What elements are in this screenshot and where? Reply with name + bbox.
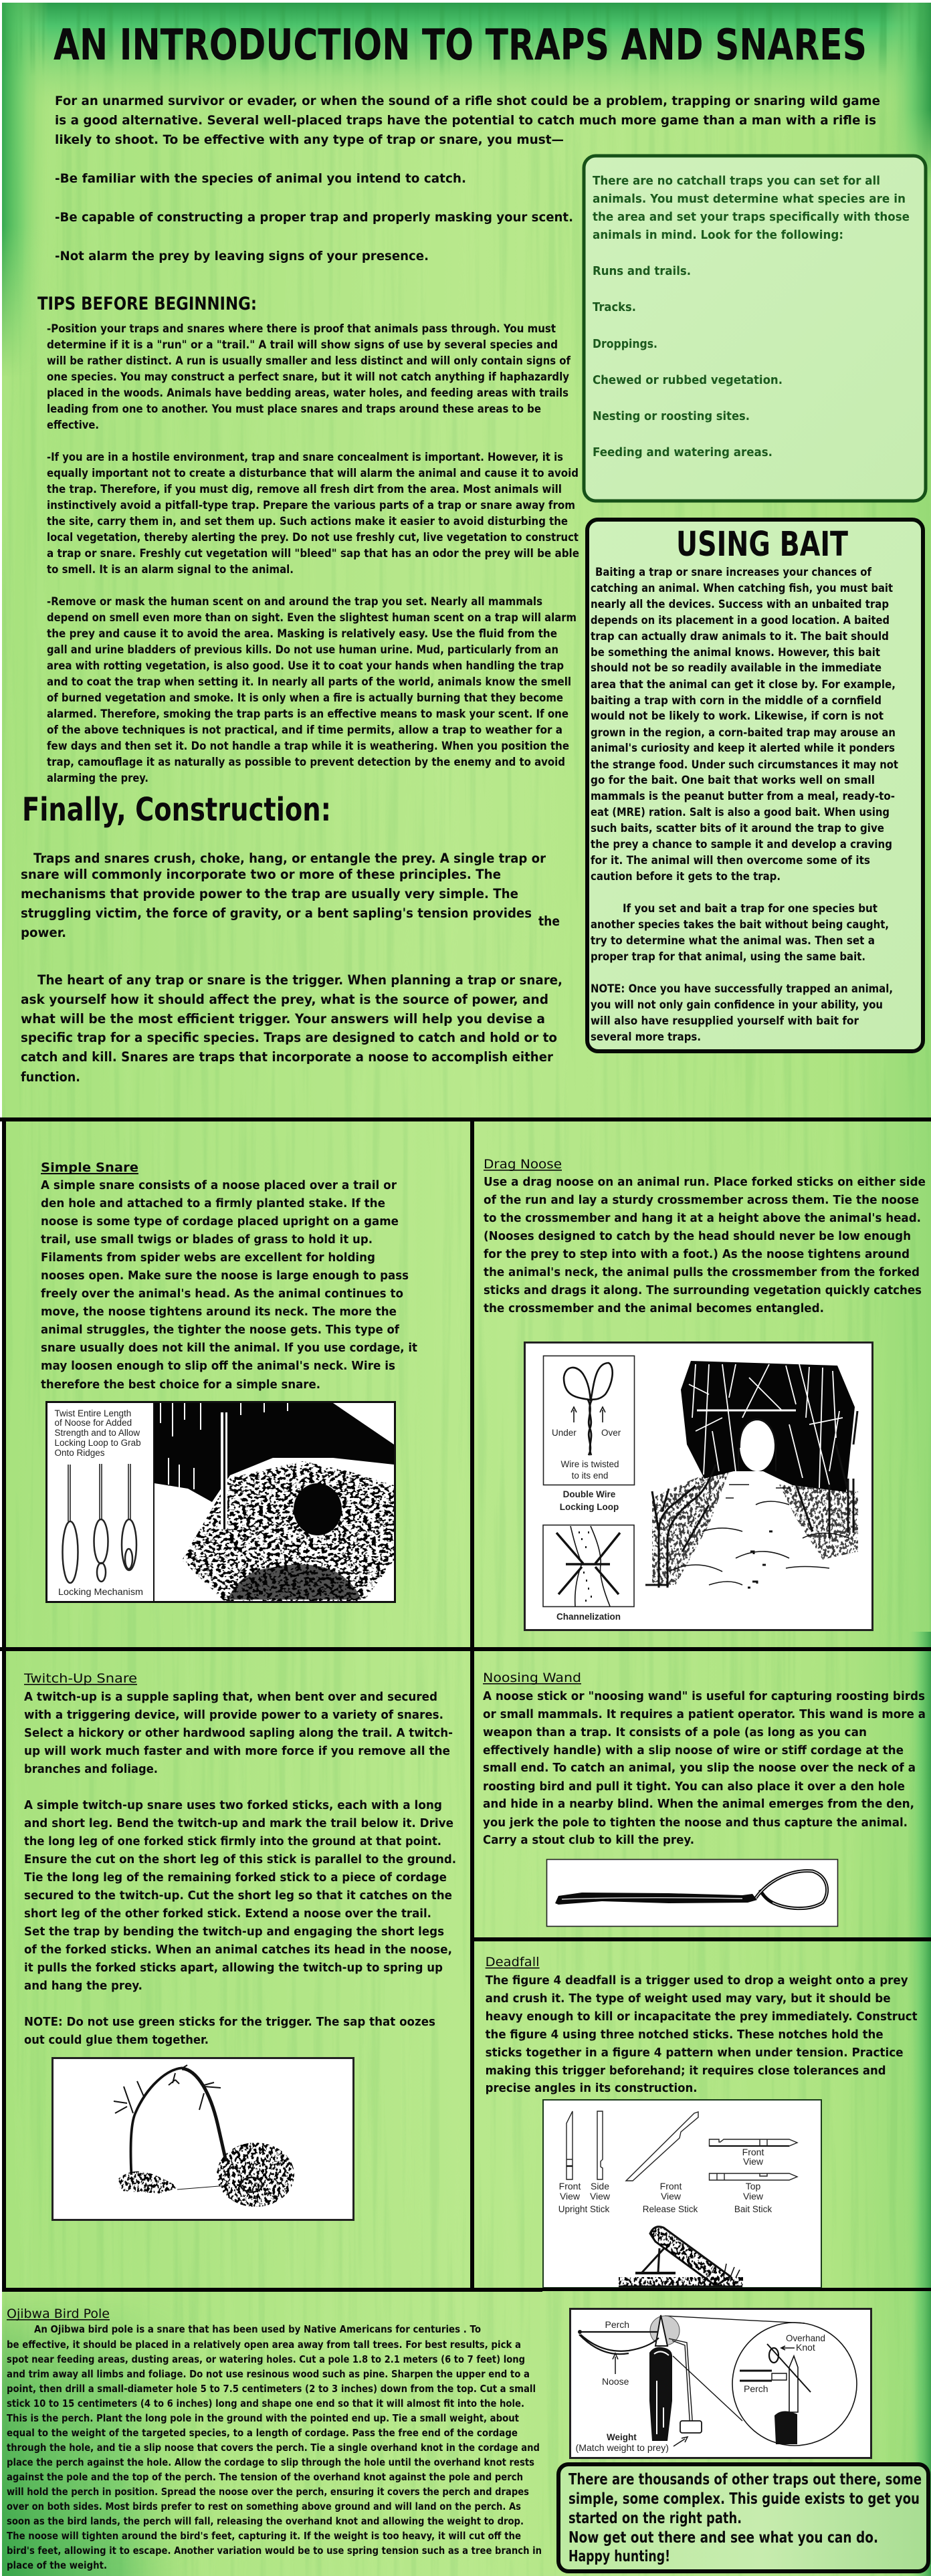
labels [575,2319,825,2453]
bait text: grown in the region, a corn-baited trap may arouse an [591,726,896,739]
bait text: be something the animal knows. However, this bait [591,646,880,659]
bait text: try to determine what the animal was. Then set a [591,934,875,947]
panel: no catchall traps: Tracks. [593,300,636,314]
bait text: trap can actually draw animals to it. The bait should [591,630,889,643]
illustration: drag noose [524,1343,872,1630]
labels: (Match weight to prey) [575,2442,669,2453]
tips text: -If you are in a hostile environment, trap and snare concealment is important. However, it is [47,451,563,463]
figure: bait stick: Front [742,2147,764,2157]
arrows [613,2353,688,2446]
intro paragraph [55,94,880,147]
tips text: the trap. Therefore, if you must dig, remove all fresh dirt from the area. Most animals will [47,483,562,496]
twitch-up text: Ensure the cut on the short leg of this stick is parallel to the ground. [24,1852,456,1866]
panel: simple snare [41,1162,417,1603]
panel: deadfall [474,1941,931,2288]
heading: drag noose: Drag Noose [484,1157,562,1172]
panel: no catchall traps: There are no catchall traps you can set for all [593,174,880,188]
bait text: nearly all the devices. Success with an unbaited trap [591,598,889,611]
ojibwa text: be effective, it should be placed in a relatively open area away from tall trees. For best results, pick a [7,2339,521,2351]
panel: no catchall traps: Runs and trails. [593,264,691,278]
ojibwa text: The noose will tighten around the bird's feet, capturing it. If the weight is too heavy, it will cut off the [7,2530,521,2542]
deadfall text: the figure 4 using three notched sticks. These notches hold the [486,2028,884,2042]
tips text: -Remove or mask the human scent on and around the trap you set. Nearly all mammals [47,595,542,608]
illustration: bent sapling snare [52,2058,353,2220]
noosing wand text: Carry a stout club to kill the prey. [483,1833,694,1847]
panel: no catchall traps: animals in mind. Look for the following: [593,228,843,242]
bait text: If you set and bait a trap for one species but [623,902,877,915]
construction text: what will be the most efficient trigger. Your answers will help you devise a [21,1011,545,1027]
construction text: The heart of any trap or snare is the trigger. When planning a trap or snare, [37,972,562,988]
twitch-up text: of the forked sticks. When an animal catches its head in the noose, [24,1943,452,1957]
ojibwa text: through the hole, and tie a slip noose that covers the perch. Tie a single overhand knot in the cordage and [7,2442,540,2454]
illustration: forest run [644,1361,858,1596]
figure: release stick: Front [660,2181,682,2191]
deadfall text: sticks together in a figure 4 pattern when under tension. Practice [486,2046,904,2060]
tips text: depend on smell even more than on sight. Even the slightest human scent on a trap will alarm [47,611,577,624]
closing callout: started on the right path. [568,2510,742,2527]
heading: ojibwa bird pole: Ojibwa Bird Pole [7,2306,110,2321]
heading: noosing wand: Noosing Wand [483,1671,581,1685]
bait text: you will not only gain confidence in your ability, you [591,998,883,1011]
requirements list: -Be capable of constructing a proper trap and properly masking your scent. [55,210,573,225]
bait text: proper trap for that animal, using the same bait. [591,950,865,963]
twitch-up text: short leg of the other forked stick. Extend a noose over the trail. [24,1907,431,1921]
figure: double wire locking loop [543,1356,634,1512]
simple snare text: A simple snare consists of a noose placed over a trail or [41,1178,397,1192]
panel: ojibwa bird pole [7,2306,871,2571]
snare caption [55,1408,143,1597]
ojibwa text: and trim away all limbs and foliage. Do not use resinous wood such as pine. Sharpen the upper end to a [7,2368,530,2380]
divider [153,1403,154,1601]
tips text: alarming the prey. [47,772,148,784]
tips text: will be rather distinct. A run is usually smaller and less distinct and will only contain signs of [47,354,571,367]
tips text: placed in the woods. Animals have bedding areas, water holes, and feeding areas with trails [47,387,568,399]
noosing wand text: weapon than a trap. It consists of a pole (as long as you can [483,1725,867,1739]
figure: double wire locking loop: to its end [572,1471,608,1481]
tips text: instinctively avoid a pitfall-type trap. Prepare the various parts of a trap or snare away from [47,499,575,512]
bait text [591,566,898,1043]
figure: channelization: Channelization [556,1612,621,1622]
simple snare text: animal struggles, the tighter the noose gets. This type of [41,1323,399,1337]
construction text: the [538,914,560,929]
construction text: Traps and snares crush, choke, hang, or entangle the prey. A single trap or [33,851,546,866]
construction text: snare will commonly incorporate two or more of these principles. The [21,867,501,882]
tips text: a trap or snare. Freshly cut vegetation will "bleed" sap that has an odor the prey will be able [47,547,579,560]
noosing wand text: effectively handle) with a slip noose of wire or stiff cordage at the [483,1743,904,1757]
construction text: function. [21,1069,80,1085]
ojibwa text: place the perch against the hole. Allow the cordage to slip through the hole until the overhand knot rests [7,2456,534,2468]
ojibwa text: will hold the perch in position. Spread the noose over the perch, ensuring it covers the perch and drapes [7,2486,529,2498]
bait text: caution before it gets to the trap. [591,870,781,883]
twitch-up text: branches and foliage. [24,1762,158,1776]
deadfall text [486,1973,918,2095]
simple snare text: move, the noose tightens around its neck. The more the [41,1305,397,1319]
bait text: area that the animal can get it close by. For example, [591,678,896,691]
detail circle lines [665,2316,805,2421]
construction text: ask yourself how it should affect the prey, what is the source of power, and [21,992,548,1007]
tips text: leading from one to another. You must place snares and traps around these areas to be [47,403,541,415]
bait text: another species takes the bait without being caught, [591,918,889,931]
figure: release stick [626,2112,698,2214]
noosing wand text: and hide in a nearby blind. When the animal emerges from the den, [483,1797,914,1811]
twitch-up text: NOTE: Do not use green sticks for the trigger. The sap that oozes [24,2015,435,2029]
simple snare text: snare usually does not kill the animal. If you use cordage, it [41,1341,417,1355]
panel: no catchall traps: the area and set your traps specifically with those [593,210,910,224]
tips text: determine if it is a "run" or a "trail." A trail will show signs of use by several species and [47,338,558,351]
twitch-up text: and short leg. Bend the twitch-up and mark the trail below it. Drive [24,1816,453,1830]
bait text: catching an animal. When catching fish, you must bait [591,582,893,595]
bait text: should not be so readily available in the immediate [591,661,882,674]
bait text: Baiting a trap or snare increases your chances of [595,566,872,578]
figure: double wire locking loop: Double Wire [563,1489,616,1499]
figure: channelization [543,1525,634,1622]
labels: Knot [796,2342,815,2353]
ojibwa text: against the pole and the top of the perch. The tension of the overhand knot against the pole and perch [7,2471,523,2483]
bait text: baiting a trap with corn in the middle of a cornfield [591,694,882,707]
noosing wand text: roosting bird and pull it tight. You can also place it over a den hole [483,1780,905,1794]
simple snare text: may loosen enough to slip off the animal's neck. Wire is [41,1359,395,1373]
figure: release stick: Release Stick [643,2204,698,2214]
ojibwa text [7,2323,542,2571]
twitch-up text: A twitch-up is a supple sapling that, when bent over and secured [24,1690,437,1704]
heading: simple snare: Simple Snare [41,1160,138,1175]
construction text: catch and kill. Snares are traps that incorporate a noose to accomplish either [21,1049,553,1065]
tips text: equally important not to create a disturbance that will alarm the animal and cause it to avoid [47,467,579,479]
pole and perch [578,2315,702,2441]
twitch-up text: and hang the prey. [24,1979,142,1993]
tips text: trap, camouflage it as naturally as possible to prevent detection by the enemy and to avoid [47,756,565,768]
ojibwa text: bird's feet, allowing it to escape. Another variation would be to use spring tension such as a tree branch in [7,2545,542,2557]
snare caption: Strength and to Allow [55,1428,140,1438]
panel: using bait [587,520,923,1051]
deadfall text: The figure 4 deadfall is a trigger used to drop a weight onto a prey [486,1973,908,1988]
figure: bait stick [709,2139,797,2214]
noosing wand text: small end. To catch an animal, you slip the noose over the neck of a [483,1761,916,1775]
icon: three nooses [63,1464,136,1583]
bait text: such baits, scatter bits of it around the trap to give [591,822,884,835]
snare caption: Twist Entire Length [55,1408,131,1418]
bait text: several more traps. [591,1031,701,1043]
illustration: figure 4 deadfall [543,2100,821,2288]
illustration: noosing wand [547,1859,837,1926]
heading: tips before beginning: TIPS BEFORE BEGINNING: [37,294,257,314]
construction text: specific trap for a specific species. Traps are designed to catch and hold or to [21,1030,557,1045]
twitch-up text: it pulls the forked sticks apart, allowing the twitch-up to spring up [24,1961,443,1975]
labels: Perch [744,2383,768,2394]
intro paragraph: is a good alternative. Several well-placed traps have the potential to catch much more game than a man with a rifle is [55,113,876,128]
bait text: go for the bait. One bait that works well on small [591,774,875,786]
intro paragraph: likely to shoot. To be effective with any type of trap or snare, you must— [55,132,564,147]
tips text: the prey and cause it to avoid the area. Masking is relatively easy. Use the fluid from the [47,627,557,640]
bait text: depends on its placement in a good location. A baited [591,614,890,627]
simple snare text: noose is some type of cordage placed upright on a game [41,1214,399,1228]
heading: deadfall: Deadfall [486,1955,540,1969]
panel: no catchall traps: Droppings. [593,337,657,351]
figure: assembled deadfall [619,2226,743,2287]
tips text: one species. You may construct a perfect snare, but it will not catch anything if haphazardly [47,370,569,383]
deadfall text: and crush it. The type of weight used may vary, but it should be [486,1992,891,2006]
tips text [47,322,579,784]
labels: Weight [607,2432,637,2442]
construction text: power. [21,925,66,940]
bait text: the strange food. Under such circumstances it may not [591,758,898,771]
figure: upright stick [558,2111,611,2214]
simple snare text: Filaments from spider webs are excellent for holding [41,1251,375,1265]
figure: bait stick: View [743,2156,764,2167]
twitch-up text: with a triggering device, will provide power to a variety of snares. [24,1708,443,1722]
twitch-up text [24,1690,456,2047]
figure: upright stick: Front [559,2181,581,2191]
snare caption: Locking Mechanism [58,1587,143,1597]
intro paragraph: For an unarmed survivor or evader, or when the sound of a rifle shot could be a problem, trapping or snaring wild game [55,94,880,108]
bait text: will also have resupplied yourself with bait for [591,1014,859,1027]
tips text: and to coat the trap when setting it. In nearly all parts of the world, animals know the smell [47,675,571,688]
heading: twitch-up snare: Twitch-Up Snare [23,1671,137,1686]
simple snare text: den hole and attached to a firmly planted stake. If the [41,1196,385,1210]
drag noose text [484,1175,926,1315]
construction text [21,851,562,1085]
tips text: of burned vegetation and smoke. It is only when a fire is actually burning that they become [47,691,563,704]
tips text: local vegetation, thereby alerting the prey. Do not use freshly cut, live vegetation to construct [47,531,579,544]
deadfall text: making this trigger beforehand; it requires close tolerances and [486,2064,886,2078]
closing callout: Happy hunting! [568,2548,670,2565]
ojibwa text: An Ojibwa bird pole is a snare that has been used by Native Americans for centuries . To [34,2323,481,2335]
drag noose text: for the prey to step into with a foot.) As the noose tightens around [484,1247,910,1261]
figure: upright stick: Upright Stick [558,2204,610,2214]
panel: no catchall traps: Chewed or rubbed vegetation. [593,373,783,387]
construction text: mechanisms that provide power to the trap are usually very simple. The [21,886,518,901]
figure: upright stick: Side [591,2181,609,2191]
ojibwa text: over on both sides. Most birds prefer to rest on something above ground and will land on the perch. As [7,2500,521,2512]
bait text: eat (MRE) ration. Salt is also a good bait. When using [591,806,890,819]
figure: double wire locking loop: Under [552,1428,577,1438]
noosing wand text [483,1689,926,1847]
bait text: the prey a chance to sample it and develop a craving [591,838,892,851]
heading: finally, construction: Finally, Construction: [22,791,331,829]
drag noose text: (Nooses designed to catch by the head should never be low enough [484,1229,911,1243]
figure: upright stick: View [590,2191,611,2202]
simple snare text: trail, use small twigs or blades of grass to hold it up. [41,1232,373,1247]
ojibwa text: soon as the bird lands, the perch will fall, releasing the overhand knot and allowing the weight to drop. [7,2515,524,2527]
tips text: to smell. It is an alarm signal to the animal. [47,563,294,576]
panel: no catchall traps: animals. You must determine what species are in [593,192,906,206]
simple snare text [41,1178,417,1392]
snare caption: Onto Ridges [55,1448,105,1458]
labels: Noose [602,2376,629,2387]
twitch-up text: up will work much faster and with more force if you remove all the [24,1744,450,1758]
bait text: for it. The animal will then overcome some of its [591,854,870,867]
figure: double wire locking loop: Over [601,1428,621,1438]
panel: no catchall traps [584,156,926,501]
panel: no catchall traps: Nesting or roosting sites. [593,409,750,423]
detail circle [732,2323,857,2446]
panel: noosing wand [474,1651,931,1938]
closing callout [558,2464,928,2571]
figure: double wire locking loop: Locking Loop [560,1502,619,1512]
bait text: would not be likely to work. Likewise, if corn is not [591,710,884,722]
ojibwa text: place of the weight. [7,2559,107,2571]
tips text: area with rotting vegetation, is also good. Use it to coat your hands when handling the trap [47,659,564,672]
bait text: animal's curiosity and keep it alerted while it ponders [591,742,895,754]
illustration: simple snare [47,1402,395,1602]
noosing wand text: you jerk the pole to tighten the noose and thus capture the animal. [483,1816,908,1830]
illustration: den hole and stake [154,1403,395,1601]
snare caption: of Noose for Added [55,1418,132,1428]
figure: release stick: View [661,2191,682,2202]
construction text: struggling victim, the force of gravity, or a bent sapling's tension provides [21,905,532,921]
labels: Perch [605,2319,629,2330]
requirements list: -Be familiar with the species of animal you intend to catch. [55,171,466,186]
labels: Overhand [786,2333,825,2343]
figure: double wire locking loop: Wire is twisted [560,1459,619,1469]
ojibwa text: point, then drill a small-diameter hole 5 to 7.5 centimeters (2 to 3 inches) down from the top. Cut a small [7,2383,536,2395]
tips text: the site, carry them in, and set them up. Such actions make it easier to avoid disturbing the [47,515,568,528]
bait text: NOTE: Once you have successfully trapped an animal, [591,982,893,995]
tips text: effective. [47,419,99,431]
tips text: of the above techniques is not practical, and if time permits, allow a trap to weather for a [47,724,562,736]
twitch-up text: Tie the long leg of the remaining forked stick to a piece of cordage [24,1870,447,1885]
twitch-up text: out could glue them together. [24,2033,209,2047]
drag noose text: the crossmember and the animal becomes entangled. [484,1301,824,1315]
twitch-up text: the long leg of one forked stick firmly into the ground at that point. [24,1834,441,1848]
tips text: -Position your traps and snares where there is proof that animals pass through. You must [47,322,556,335]
illustration: ojibwa bird pole [570,2309,871,2458]
requirements list: -Not alarm the prey by leaving signs of your presence. [55,249,429,263]
simple snare text: freely over the animal's head. As the animal continues to [41,1287,403,1301]
figure: bait stick: Bait Stick [734,2204,772,2214]
bait text: mammals is the peanut butter from a meal, ready-to- [591,790,895,802]
simple snare text: nooses open. Make sure the noose is large enough to pass [41,1269,409,1283]
tips text: gall and urine bladders of previous kills. Do not use human urine. Mud, particularly from an [47,643,558,656]
tips text: few days and then set it. Do not handle a trap while it is weathering. When you position the [47,740,569,752]
panel: twitch-up snare [24,1673,455,2221]
ojibwa text: stick 10 to 15 centimeters (4 to 6 inches) long and shape one end so that it will almost fit into the hole. [7,2397,524,2409]
simple snare text: therefore the best choice for a simple snare. [41,1378,320,1392]
requirements list [55,171,573,263]
figure: upright stick: View [560,2191,581,2202]
twitch-up text: A simple twitch-up snare uses two forked sticks, each with a long [24,1798,442,1812]
panel: no catchall traps: Feeding and watering areas. [593,445,772,459]
snare caption: Locking Loop to Grab [55,1438,141,1448]
ojibwa text: spot near feeding areas, dusting areas, or watering holes. Cut a pole 1.8 to 2.1 meters (6 to 7 feet) long [7,2353,525,2365]
figure: bait stick: Top [746,2181,760,2191]
twitch-up text: secured to the twitch-up. Cut the short leg so that it catches on the [24,1889,452,1903]
deadfall text: precise angles in its construction. [486,2081,698,2095]
heading: using bait: USING BAIT [676,525,848,564]
figure: bait stick: View [743,2191,764,2202]
panel: drag noose [484,1160,926,1631]
twitch-up text: Select a hickory or other hardwood sapling along the trail. A twitch- [24,1726,453,1740]
panel frame lines [0,1117,931,2292]
ojibwa text: equal to the weight of the targeted species, to a length of cordage. Pass the free end of the cordage [7,2427,518,2439]
twitch-up text: Set the trap by bending the twitch-up and engaging the short legs [24,1925,444,1939]
ojibwa text: This is the perch. Plant the long pole in the ground with the pointed end up. Tie a small weight, about [7,2412,519,2424]
tips text: alarmed. Therefore, smoking the trap parts is an effective means to mask your scent. If one [47,708,568,720]
